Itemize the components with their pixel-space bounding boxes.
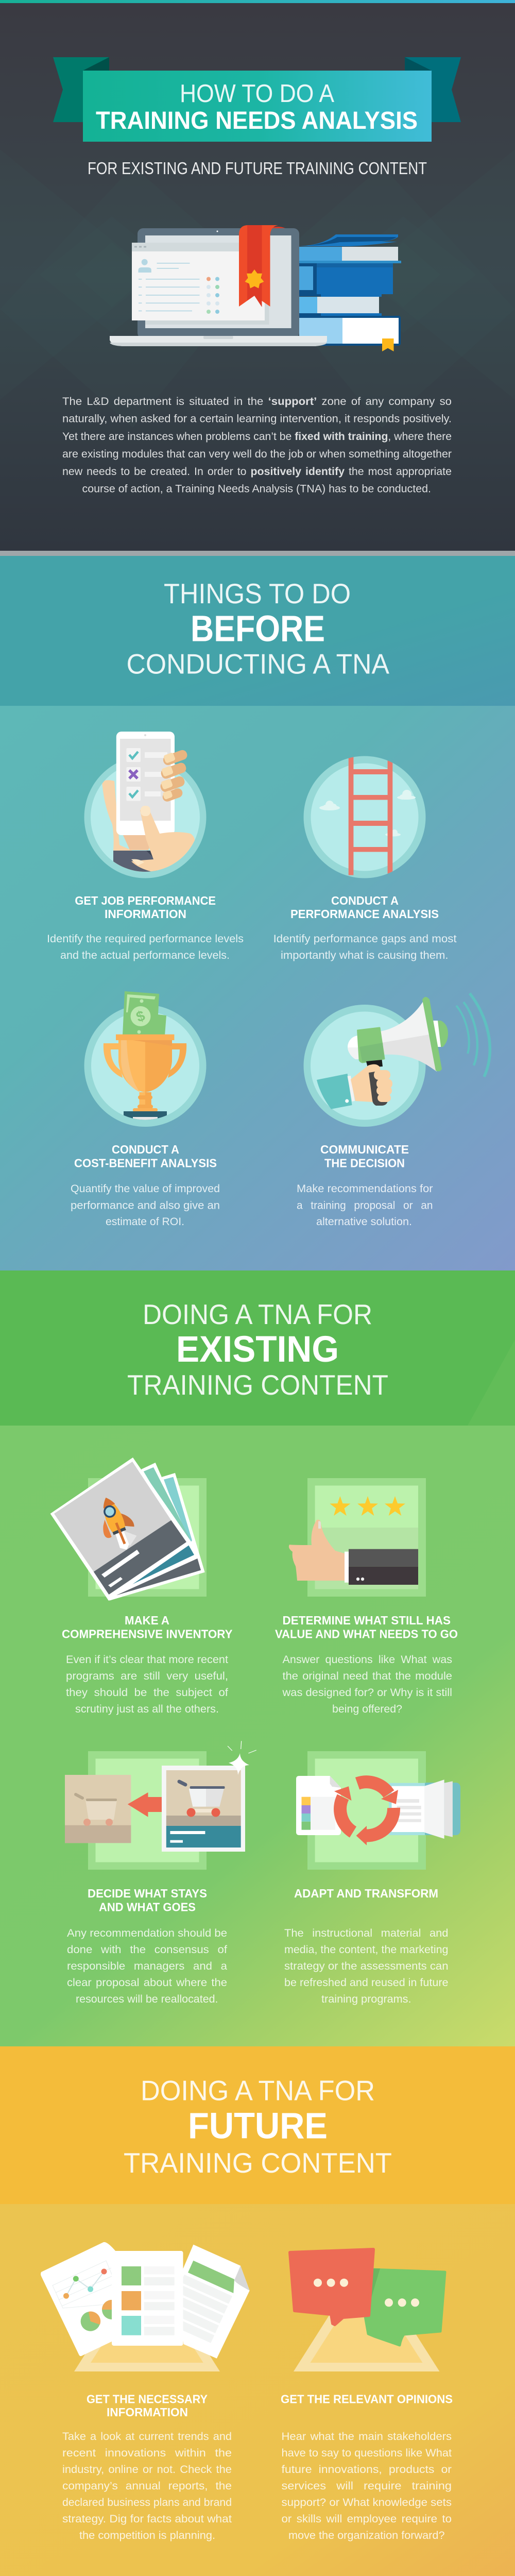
divider band [0,551,515,556]
panel: existing steps [0,1426,515,2046]
section header: existing: TRAINING CONTENT [127,1369,388,1401]
step title: AND WHAT GOES [99,1900,196,1913]
step description: industry, online or not. Check the [62,2464,232,2476]
step description: estimate of ROI. [106,1216,184,1228]
icon: book stack [299,234,401,351]
step description: have to say to questions like What [281,2447,452,2459]
step title [290,894,439,921]
icon: red bookmark [239,225,285,307]
panel: intro [0,3,515,551]
step description: Quantify the value of improved [71,1183,220,1195]
step description [273,933,457,961]
step description [284,1927,448,2005]
step description: Hear what the main stakeholders [281,2431,452,2443]
step description: scrutiny just as all the others. [75,1703,219,1715]
step description: strategy or the assessments can [284,1960,448,1972]
intro text block [62,396,452,495]
subtitle: FOR EXISTING AND FUTURE TRAINING CONTENT [88,159,427,178]
new cart card [162,1766,245,1852]
step description: was designed for? or Why is it still [282,1687,452,1699]
intro text block: new needs to be created. In order to positively identify the most appropriate [62,466,452,478]
section header: future: TRAINING CONTENT [124,2147,392,2179]
section header: existing: EXISTING [176,1329,339,1370]
step description: alternative solution. [316,1216,412,1228]
step description [67,1927,227,2005]
step description: and the actual performance levels. [60,950,230,961]
section header: future: DOING A TNA FOR [141,2074,375,2106]
step description: responsible managers and a [67,1960,227,1972]
step title: GET THE NECESSARY [87,2393,208,2406]
left report [41,2242,149,2356]
icon: trophy with money [84,991,206,1127]
step description [71,1183,220,1228]
step description: the original need that the module [282,1670,452,1682]
step description [282,1654,452,1715]
title line 1: HOW TO DO A [180,80,334,108]
step title: ADAPT AND TRANSFORM [294,1887,438,1900]
step title: DETERMINE WHAT STILL HAS [282,1614,451,1627]
step title: GET THE RELEVANT OPINIONS [281,2393,453,2406]
step title [320,1143,409,1170]
step description: clear proposal about where the [67,1977,227,1989]
step title: VALUE AND WHAT NEEDS TO GO [275,1627,458,1640]
step title: CONDUCT A [112,1143,179,1156]
center report [112,2251,183,2346]
intro text block: are existing modules that can very well do the job or when something altogether [62,448,452,460]
icon: thumbs up with stars [289,1478,426,1597]
panel: before steps [0,706,515,1270]
icon: reports fan [41,2242,250,2371]
section header: before: CONDUCTING A TNA [127,648,389,680]
step title: THE DECISION [324,1156,405,1170]
step description: the competition is planning. [79,2530,215,2541]
step description: they should be the subject of [66,1687,228,1699]
step description: be refreshed and reused in future [284,1977,448,1989]
icon: photo stack with rocket [50,1458,207,1601]
icon: speech bubbles [290,2249,445,2371]
intro text block: course of action, a Training Needs Analysis (TNA) has to be conducted. [82,483,431,495]
step title: INFORMATION [107,2405,188,2419]
icon: laptop [110,228,327,346]
faded cart card [65,1775,131,1843]
section header: future [0,2046,515,2204]
intro text block: naturally, when asked for a certain learning intervention, it responds positively. [62,413,452,425]
section header: before [0,556,515,706]
cycle arrows [334,1782,398,1845]
step description: importantly what is causing them. [281,950,448,961]
step description: services will require training [281,2480,452,2492]
step description: move the organization forward? [288,2530,445,2541]
intro text block: Yet there are instances when problems can’t be fixed with training, where there [62,431,452,443]
step title [74,1143,217,1170]
step description: performance and also give an [71,1199,220,1212]
red bubble [290,2249,373,2325]
step description: a training proposal or an [297,1199,433,1212]
step description: The instructional material and [284,1927,448,1939]
section header: before: THINGS TO DO [164,578,351,609]
step description: media, the content, the marketing [284,1944,448,1956]
step title: COMPREHENSIVE INVENTORY [62,1627,233,1640]
top accent band [0,0,515,3]
step description: Answer questions like What was [282,1654,452,1666]
step description: Even if it’s clear that more recent [66,1654,228,1666]
section header: existing [0,1270,515,1426]
step description: Take a look at current trends and [62,2431,232,2443]
step title [88,1887,207,1913]
step description: or skills will employee require to [281,2513,452,2525]
section header: future: FUTURE [188,2106,328,2146]
icon: ladder [304,747,425,878]
step description: recent innovations within the [62,2447,232,2459]
icon: trophy with money: $ [134,1007,147,1025]
step title: CONDUCT A [331,894,399,907]
step title: MAKE A [125,1614,169,1627]
step description: Identify performance gaps and most [273,933,457,945]
step description: Identify the required performance levels [47,933,244,945]
step description: future innovations, products or [281,2464,452,2476]
icon: shopping cart update [65,1741,256,1870]
icon: rocket [92,1492,142,1555]
step description: programs are still very useful, [66,1670,228,1682]
step title: DECIDE WHAT STAYS [88,1887,207,1900]
illustration: laptop with books [110,225,401,351]
sparkle [228,1741,256,1775]
title line 2: TRAINING NEEDS ANALYSIS [96,107,418,134]
step description: strategy. Dig for facts about what [62,2513,232,2525]
step description [297,1183,433,1228]
step title: COST-BENEFIT ANALYSIS [74,1156,217,1170]
step description: declared business plans and brand [62,2497,232,2509]
step description [66,1654,228,1715]
step title [275,1614,458,1640]
step title: GET JOB PERFORMANCE [75,894,216,907]
title ribbon [53,57,461,142]
intro text block: The L&D department is situated in the ‘support’ zone of any company so [62,396,452,408]
step title: PERFORMANCE ANALYSIS [290,907,439,921]
document [296,1776,341,1835]
section header: before: BEFORE [191,609,325,649]
panel: future steps [0,2204,515,2576]
step description: training programs. [321,1993,411,2005]
step description: being offered? [332,1703,402,1715]
step description: company’s annual reports, the [62,2480,232,2492]
green bubble [365,2268,445,2345]
step title [87,2393,208,2419]
app window [132,243,265,320]
step title [62,1614,233,1640]
step description: support? or What knowledge sets [281,2497,452,2509]
icon: megaphone in hand [304,993,490,1127]
icon: documents recycled [296,1751,460,1870]
step description [281,2431,452,2541]
step description: resources will be reallocated. [76,1993,218,2005]
step title [75,894,216,921]
book [389,1780,460,1839]
step title: COMMUNICATE [320,1143,409,1156]
right report [163,2245,250,2359]
step title: INFORMATION [105,907,186,921]
step description [62,2431,232,2541]
icon: phone in hand [84,732,206,878]
step description: Make recommendations for [297,1183,433,1195]
step description: done with the consensus of [67,1944,227,1956]
step description: Any recommendation should be [67,1927,227,1939]
section header: existing: DOING A TNA FOR [143,1298,372,1330]
arrow [128,1792,168,1817]
step description [47,933,244,961]
